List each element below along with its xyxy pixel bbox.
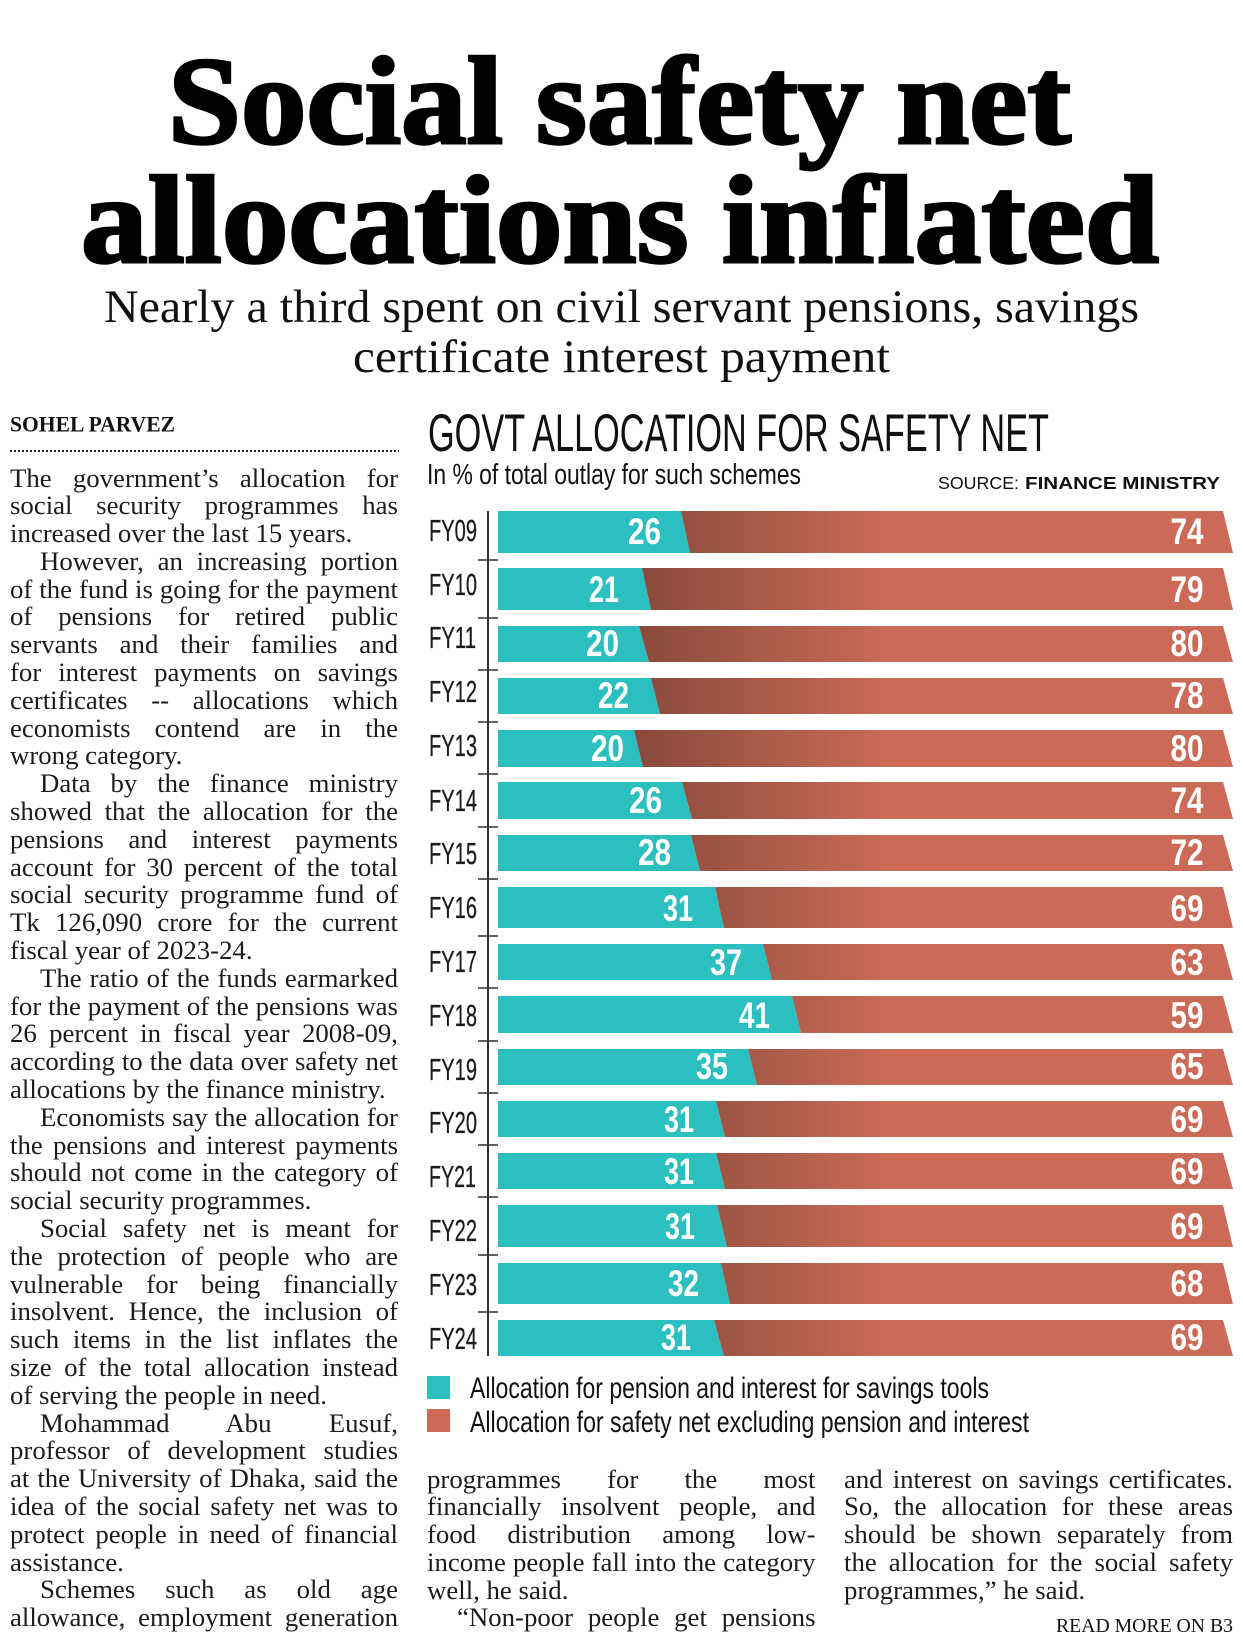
article column 1: account for 30 percent of the total bbox=[10, 852, 398, 882]
title: allocations inflated bbox=[81, 152, 1159, 290]
bar: FY09: FY09 bbox=[429, 513, 477, 548]
bar: FY16: 69 bbox=[1170, 888, 1204, 929]
article column 1: increased over the last 15 years. bbox=[10, 518, 352, 548]
article column 1: of pensions for retired public bbox=[10, 601, 398, 631]
article column 1: The government’s allocation for bbox=[10, 462, 398, 492]
bar: FY18: 59 bbox=[1170, 995, 1204, 1036]
bar: FY13: FY13 bbox=[429, 728, 477, 763]
article column 1: should not come in the category of bbox=[10, 1157, 398, 1187]
article column 1: fiscal year of 2023-24. bbox=[10, 935, 253, 965]
bar: FY18 bbox=[429, 995, 1233, 1036]
article column 1: at the University of Dhaka, said the bbox=[10, 1463, 398, 1493]
subtitle: Nearly a third spent on civil servant pensions, savings bbox=[104, 281, 1139, 333]
bar: FY19: 65 bbox=[1170, 1046, 1204, 1087]
bar: FY17: 63 bbox=[1170, 942, 1204, 983]
bar: FY09 bbox=[429, 511, 1233, 553]
article column 3: the allocation for the social safety bbox=[844, 1547, 1233, 1577]
bar: FY10: FY10 bbox=[429, 567, 477, 602]
title: Social safety net bbox=[168, 33, 1071, 171]
article column 3 bbox=[844, 1464, 1233, 1605]
bar: FY24 bbox=[429, 1317, 1233, 1358]
bar: FY11: FY11 bbox=[429, 620, 476, 655]
article column 2: well, he said. bbox=[427, 1575, 568, 1605]
bar: FY10: 79 bbox=[1170, 569, 1204, 610]
article column 1: Economists say the allocation for bbox=[40, 1102, 398, 1132]
article column 1: vulnerable for being financially bbox=[10, 1269, 398, 1299]
article column 1: Social safety net is meant for bbox=[40, 1213, 398, 1243]
read more note: READ MORE ON B3 bbox=[1056, 1615, 1233, 1637]
article column 1: servants and their families and bbox=[10, 629, 398, 659]
bar: FY21 bbox=[429, 1151, 1233, 1194]
bar: FY23 bbox=[429, 1263, 1233, 1304]
article column 1: The ratio of the funds earmarked bbox=[40, 963, 398, 993]
article column 2: income people fall into the category bbox=[427, 1547, 816, 1577]
article column 1: of the fund is going for the payment bbox=[10, 574, 398, 604]
article column 3: programmes,” he said. bbox=[844, 1575, 1085, 1605]
article column 1: for interest payments on savings bbox=[10, 657, 398, 687]
bar: FY10 bbox=[429, 567, 1233, 610]
article column 1: social security programmes. bbox=[10, 1185, 311, 1215]
article column 1: wrong category. bbox=[10, 740, 182, 770]
article column 2: “Non-poor people get pensions bbox=[457, 1602, 816, 1632]
legend bbox=[427, 1372, 1030, 1439]
article column 1: showed that the allocation for the bbox=[10, 796, 398, 826]
bar: FY18: 41 bbox=[739, 995, 770, 1036]
subtitle bbox=[104, 281, 1139, 383]
bar: FY12 bbox=[429, 674, 1233, 716]
legend: safety net excluding pension: Allocation for safety net excluding pension and interest bbox=[470, 1406, 1030, 1439]
bar: FY20: 31 bbox=[664, 1099, 694, 1140]
bar: FY13: 80 bbox=[1170, 728, 1204, 769]
bar: FY16: FY16 bbox=[429, 890, 477, 925]
bar: FY24: 69 bbox=[1170, 1317, 1204, 1358]
article column 1: allocations by the finance ministry. bbox=[10, 1074, 386, 1104]
chart subheading: In % of total outlay for such schemes bbox=[427, 459, 801, 491]
article column 2 bbox=[427, 1464, 816, 1632]
bar: FY15 bbox=[429, 832, 1233, 873]
bar: FY14: 26 bbox=[629, 780, 662, 821]
bar: FY12: 78 bbox=[1170, 675, 1204, 716]
bar: FY17: FY17 bbox=[429, 944, 477, 979]
bar: FY23: FY23 bbox=[429, 1267, 477, 1302]
bar: FY11: 80 bbox=[1170, 623, 1204, 664]
article column 1: such items in the list inflates the bbox=[10, 1324, 398, 1354]
source note bbox=[938, 473, 1220, 493]
bar: FY24: 31 bbox=[661, 1317, 691, 1358]
article column 3: should be shown separately from bbox=[844, 1519, 1233, 1549]
article column 1: the pensions and interest payments bbox=[10, 1130, 398, 1160]
bar: FY22 bbox=[429, 1205, 1233, 1248]
subtitle: certificate interest payment bbox=[353, 331, 890, 383]
bar: FY14: FY14 bbox=[429, 783, 477, 818]
axis with ticks bbox=[478, 511, 498, 1356]
article column 1: Data by the finance ministry bbox=[40, 768, 398, 798]
source note: FINANCE MINISTRY bbox=[1025, 473, 1220, 493]
bar: FY21: 31 bbox=[664, 1151, 694, 1192]
bar: FY19: FY19 bbox=[429, 1052, 477, 1087]
article column 1: idea of the social safety net was to bbox=[10, 1491, 398, 1521]
bar: FY10: 21 bbox=[589, 569, 619, 610]
article column 1: 26 percent in fiscal year 2008-09, bbox=[10, 1018, 398, 1048]
bar: FY13 bbox=[429, 728, 1233, 769]
bar: FY20: 69 bbox=[1170, 1099, 1204, 1140]
bar: FY14: 74 bbox=[1170, 780, 1204, 821]
article column 1: assistance. bbox=[10, 1547, 124, 1577]
bar: FY12: 22 bbox=[598, 675, 629, 716]
bar: FY22: 69 bbox=[1170, 1206, 1204, 1247]
bar: FY24: FY24 bbox=[429, 1321, 477, 1356]
stacked bar chart bbox=[429, 511, 1233, 1358]
article column 1 bbox=[10, 462, 398, 1632]
bar: FY15: FY15 bbox=[429, 836, 477, 871]
bar: FY21: FY21 bbox=[429, 1159, 476, 1194]
article column 1: economists contend are in the bbox=[10, 713, 398, 743]
article column 1: Tk 126,090 crore for the current bbox=[10, 907, 398, 937]
article column 1: of serving the people in need. bbox=[10, 1380, 327, 1410]
article column 1: protect people in need of financial bbox=[10, 1519, 398, 1549]
article column 1: professor of development studies bbox=[10, 1435, 398, 1465]
bar: FY12: FY12 bbox=[429, 674, 477, 709]
bar: FY17 bbox=[429, 942, 1233, 983]
article column 1: However, an increasing portion bbox=[40, 546, 398, 576]
article column 1: social security programmes has bbox=[10, 490, 398, 520]
bar: FY22: 31 bbox=[665, 1206, 695, 1247]
bar: FY20 bbox=[429, 1099, 1233, 1140]
article column 1: size of the total allocation instead bbox=[10, 1352, 398, 1382]
bar: FY16: 31 bbox=[663, 888, 693, 929]
article column 1: Mohammad Abu Eusuf, bbox=[40, 1408, 398, 1438]
article column 1: insolvent. Hence, the inclusion of bbox=[10, 1296, 398, 1326]
title bbox=[81, 33, 1159, 290]
bar: FY11 bbox=[429, 620, 1233, 664]
article column 3: So, the allocation for these areas bbox=[844, 1491, 1233, 1521]
bar: FY13: 20 bbox=[591, 728, 624, 769]
source note: SOURCE: bbox=[938, 473, 1019, 493]
bar: FY20: FY20 bbox=[429, 1105, 477, 1140]
bar: FY18: FY18 bbox=[429, 998, 477, 1033]
bar: FY17: 37 bbox=[710, 942, 742, 983]
article column 1: according to the data over safety net bbox=[10, 1046, 398, 1076]
legend: pension and interest: Allocation for pension and interest for savings tools bbox=[470, 1372, 989, 1405]
article column 1: for the payment of the pensions was bbox=[10, 991, 398, 1021]
bar: FY15: 72 bbox=[1170, 832, 1204, 873]
bar: FY19: 35 bbox=[696, 1046, 728, 1087]
bar: FY15: 28 bbox=[638, 832, 671, 873]
bar: FY09: 74 bbox=[1170, 511, 1204, 552]
article column 1: pensions and interest payments bbox=[10, 824, 398, 854]
bar: FY23: 32 bbox=[668, 1263, 699, 1304]
bar: FY16 bbox=[429, 887, 1233, 929]
article column 1: allowance, employment generation bbox=[10, 1602, 398, 1632]
article column 3: and interest on savings certificates. bbox=[844, 1464, 1233, 1494]
article column 1: Schemes such as old age bbox=[40, 1574, 398, 1604]
article column 2: programmes for the most bbox=[427, 1464, 816, 1494]
bar: FY09: 26 bbox=[628, 511, 661, 552]
article column 2: food distribution among low- bbox=[427, 1519, 816, 1549]
bar: FY23: 68 bbox=[1170, 1263, 1204, 1304]
bar: FY22: FY22 bbox=[429, 1213, 477, 1248]
byline: SOHEL PARVEZ bbox=[10, 412, 175, 436]
bar: FY21: 69 bbox=[1170, 1151, 1204, 1192]
article column 1: social security programme fund of bbox=[10, 879, 398, 909]
bar: FY14 bbox=[429, 780, 1233, 821]
article column 2: financially insolvent people, and bbox=[427, 1491, 816, 1521]
bar: FY11: 20 bbox=[586, 623, 619, 664]
article column 1: certificates -- allocations which bbox=[10, 685, 398, 715]
article column 1: the protection of people who are bbox=[10, 1241, 398, 1271]
bar: FY19 bbox=[429, 1046, 1233, 1087]
